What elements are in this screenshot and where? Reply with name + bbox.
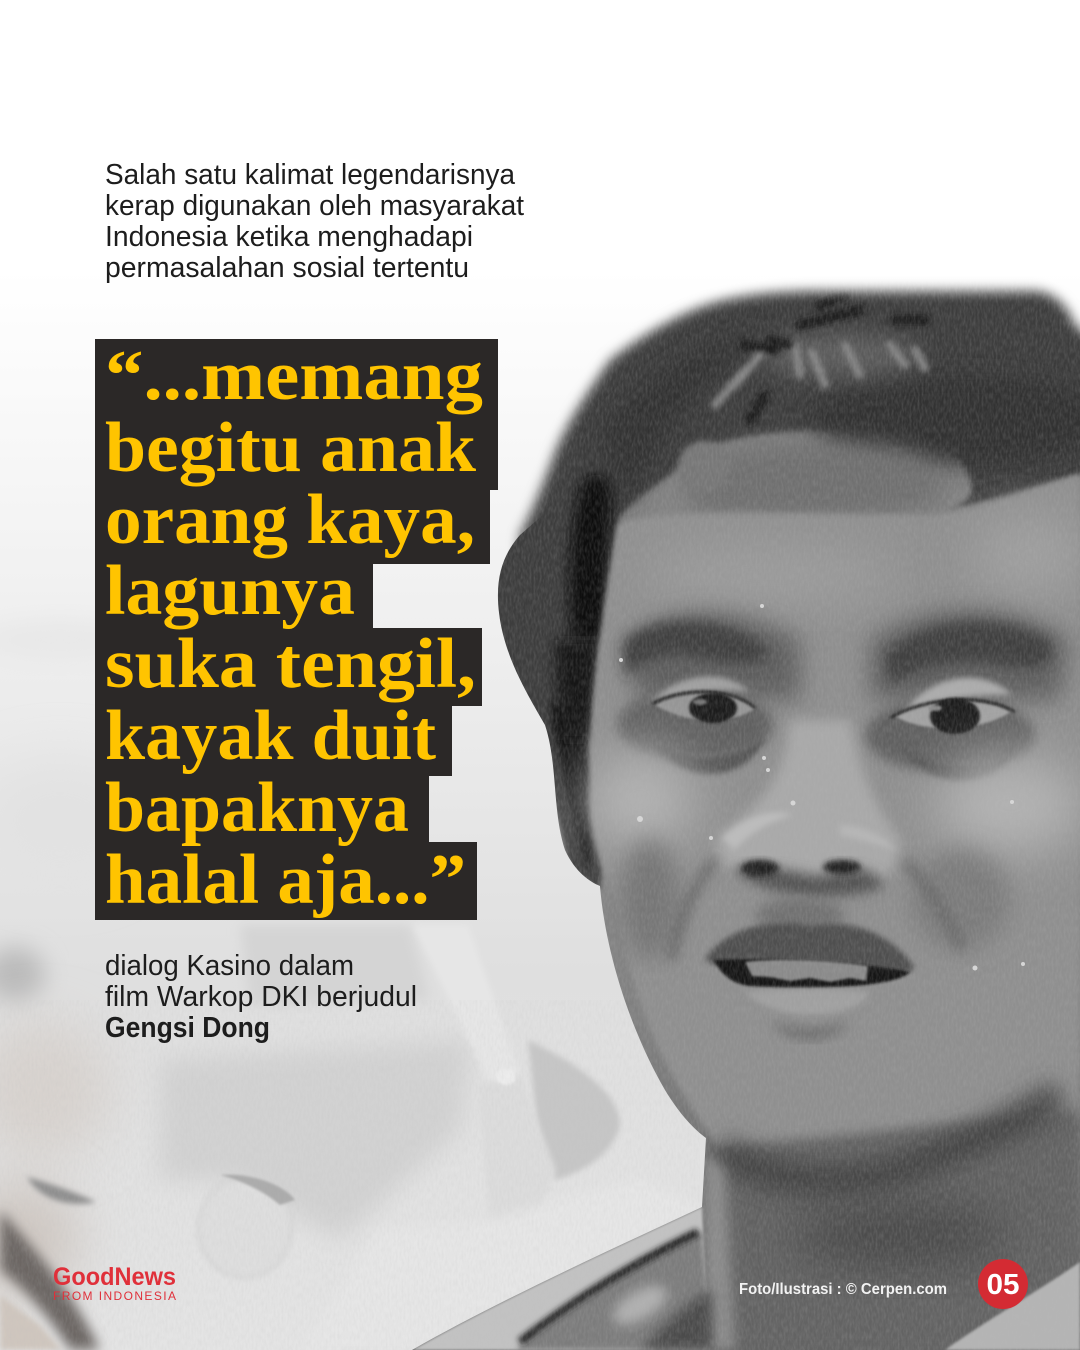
quote text: suka tengil,	[105, 625, 476, 703]
quote text: halal aja...”	[105, 841, 466, 919]
mouth	[714, 959, 910, 988]
hair highlights and dark strands	[715, 295, 925, 420]
attribution text: dialog Kasino dalam	[105, 950, 354, 982]
hair dark side band	[569, 474, 612, 640]
quote text	[105, 337, 483, 919]
lower lip	[745, 989, 870, 1015]
smile lines	[672, 860, 715, 960]
photo credit: Foto/Ilustrasi : © Cerpen.com	[739, 1281, 947, 1298]
under-eye bags	[662, 739, 764, 776]
upper lip	[705, 923, 915, 973]
cheeks	[585, 750, 695, 850]
eye: left	[655, 693, 755, 720]
attribution text: Gengsi Dong	[105, 1012, 270, 1044]
intro text: Salah satu kalimat legendarisnya	[105, 159, 516, 191]
floor	[300, 1180, 705, 1350]
brows	[625, 621, 770, 675]
collar	[945, 1262, 1080, 1350]
skin specks	[619, 604, 1025, 970]
leg	[413, 925, 520, 1085]
quote text: orang kaya,	[105, 481, 475, 559]
page number badge	[978, 1259, 1028, 1309]
bowl	[198, 1178, 292, 1278]
quote text: kayak duit	[105, 697, 436, 775]
intro text	[105, 159, 524, 284]
quote text: lagunya	[105, 552, 355, 630]
attribution text: film Warkop DKI berjudul	[105, 981, 417, 1013]
foot shadow	[528, 1040, 620, 1180]
nose	[717, 720, 901, 900]
hair shading	[810, 375, 1080, 465]
logo: GoodNews from Indonesia: FROM INDONESIA	[53, 1289, 176, 1303]
eye: right	[895, 701, 1010, 728]
photo: portrait of Kasino	[400, 260, 1080, 1350]
intro text: permasalahan sosial tertentu	[105, 252, 469, 284]
logo: GoodNews from Indonesia	[53, 1263, 176, 1303]
forehead light	[682, 551, 858, 599]
teeth	[745, 960, 868, 982]
intro text: Indonesia ketika menghadapi	[105, 221, 473, 253]
attribution text	[105, 950, 417, 1044]
quote text: “...memang	[105, 337, 483, 415]
eye sockets	[617, 689, 773, 761]
hair	[480, 260, 1080, 890]
quote highlight block	[95, 337, 498, 920]
neck	[714, 1107, 1080, 1252]
brow region shadow	[620, 610, 1070, 700]
shirt	[412, 1207, 708, 1350]
quote text: begitu anak	[105, 409, 477, 487]
logo: GoodNews from Indonesia: GoodNews	[53, 1263, 176, 1291]
page number badge: 05	[986, 1269, 1020, 1301]
hair tuft on forehead	[676, 438, 718, 470]
face base	[589, 475, 1080, 1165]
left figure	[27, 1177, 96, 1204]
neck side highlight	[703, 1150, 735, 1350]
intro text: kerap digunakan oleh masyarakat	[105, 190, 524, 222]
forehead shadow below hair	[680, 443, 945, 520]
jaw shadow	[720, 1095, 1060, 1180]
lids	[650, 676, 750, 702]
quote text: bapaknya	[105, 769, 409, 847]
